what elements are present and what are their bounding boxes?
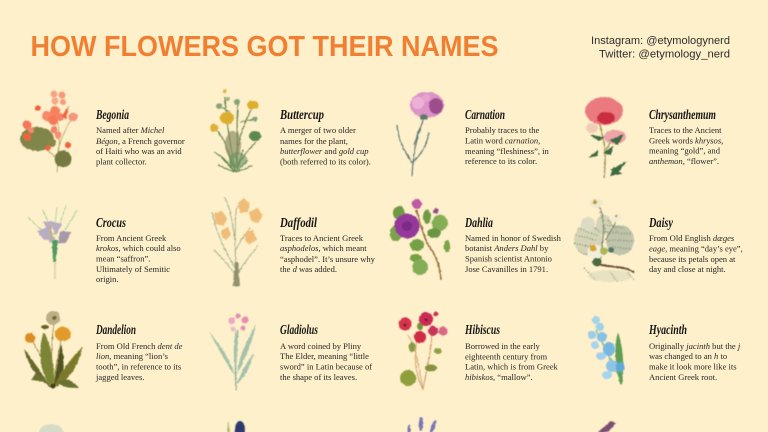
card: Dandelion: [24, 311, 183, 388]
heading: Crocus: [96, 216, 126, 231]
icon: daffodil flower: [212, 197, 263, 286]
text block: A merger of two older: [280, 125, 356, 135]
heading: Hyacinth: [648, 323, 687, 338]
heading: Dahlia: [464, 216, 493, 231]
text block: asphodelos, which meant: [280, 243, 367, 253]
card: Gladiolus: [209, 314, 372, 390]
icon: dandelion flower: [24, 311, 83, 388]
card: Begonia: [20, 90, 185, 173]
text block: hibiskos, “mallow”.: [465, 372, 533, 382]
text block: Bégon, a French governor: [96, 136, 185, 146]
text block: From Ancient Greek: [96, 233, 167, 243]
text block: “asphodel”. It’s unsure why: [280, 254, 376, 264]
text block: names for the plant,: [280, 136, 348, 146]
text block: origin.: [96, 274, 119, 284]
heading: Hibiscus: [464, 323, 500, 338]
social handles: Instagram: @etymologynerd: [591, 35, 730, 47]
text block: Borrowed in the early: [465, 341, 540, 351]
card: Hibiscus: [398, 312, 559, 390]
text block: anthemon, “flower”.: [649, 156, 719, 166]
icon: hyacinth flower: [588, 316, 624, 385]
text block: Probably traces to the: [465, 125, 539, 135]
icon: begonia flower: [20, 90, 78, 173]
icon: lavender: [408, 417, 437, 432]
icon: dahlia flower: [390, 199, 450, 280]
text block: Ultimately of Semitic: [96, 264, 170, 274]
text block: Latin word carnation,: [465, 136, 540, 146]
text block: Spanish scientist Antonio: [465, 254, 552, 264]
text block: eage, meaning “day’s eye”,: [649, 244, 743, 254]
icon: purple spike: [598, 421, 616, 432]
text block: Traces to Ancient Greek: [280, 233, 364, 243]
text block: lion, meaning “lion’s: [96, 351, 168, 361]
text block: make it look more like its: [649, 362, 737, 372]
text block: botanist Anders Dahl by: [465, 243, 548, 253]
card: Buttercup: [210, 89, 371, 172]
text block: reference to its color.: [465, 156, 537, 166]
text block: Named after Michel: [96, 125, 164, 135]
text block: krokos, which could also: [96, 243, 181, 253]
text block: Originally jacinth but the j: [649, 341, 740, 351]
card: Chrysanthemum: [585, 97, 723, 178]
icon: daisy flower: [574, 198, 634, 282]
icon: iris: [227, 420, 245, 432]
heading: Daisy: [648, 216, 674, 231]
icon: crocus flower: [28, 205, 77, 279]
heading: Gladiolus: [280, 323, 318, 338]
heading: Carnation: [465, 108, 505, 123]
text block: The Elder, meaning “little: [280, 351, 369, 361]
text block: the d was added.: [280, 264, 337, 274]
icon: hibiscus flower: [398, 312, 448, 390]
text block: From Old English dæges: [649, 233, 734, 243]
icon: chrysanthemum flower: [585, 97, 627, 178]
text block: day and close at night.: [649, 264, 726, 274]
icon: buttercup flower: [210, 89, 261, 172]
text block: jagged leaves.: [95, 372, 144, 382]
icon: carnation flower: [397, 92, 444, 176]
text block: (both referred to its color).: [280, 156, 371, 166]
heading: Buttercup: [279, 108, 324, 123]
heading: Dandelion: [95, 323, 136, 338]
icon: white flower: [39, 424, 63, 432]
text block: Greek words khrysos,: [649, 136, 723, 146]
text block: sword” in Latin because of: [280, 362, 372, 372]
card: Carnation: [397, 92, 550, 176]
text block: was changed to an h to: [649, 351, 727, 361]
row 4 flower tops: [39, 417, 616, 432]
heading: Chrysanthemum: [649, 108, 716, 123]
text block: Named in honor of Swedish: [465, 233, 562, 243]
text block: butterflower and gold cup: [280, 146, 369, 156]
text block: Jose Cavanilles in 1791.: [465, 264, 548, 274]
text block: Traces to the Ancient: [649, 125, 722, 135]
text block: plant collector.: [96, 156, 147, 166]
text block: because its petals open at: [649, 254, 736, 264]
card: Daffodil: [212, 197, 376, 286]
text block: Latin, which is from Greek: [465, 362, 559, 372]
text block: tooth”, in reference to its: [96, 362, 182, 372]
text block: meaning “fleshiness”, in: [465, 146, 550, 156]
card: Hyacinth: [588, 316, 741, 385]
text block: Ancient Greek root.: [649, 372, 717, 382]
text block: the shape of its leaves.: [280, 372, 357, 382]
heading: Begonia: [95, 108, 129, 123]
social handles: [591, 35, 730, 60]
card: Crocus: [28, 205, 181, 284]
text block: meaning “gold”, and: [649, 146, 721, 156]
card: Daisy: [574, 198, 743, 282]
text block: eighteenth century from: [465, 352, 547, 362]
icon: gladiolus flower: [209, 314, 256, 390]
text block: A word coined by Pliny: [280, 341, 362, 351]
social handles: Twitter: @etymology_nerd: [599, 48, 730, 60]
heading: Daffodil: [279, 216, 317, 231]
text block: of Haiti who was an avid: [96, 146, 182, 156]
text block: From Old French dent de: [96, 341, 182, 351]
text block: mean “saffron”.: [96, 254, 150, 264]
card: Dahlia: [390, 199, 562, 280]
title: HOW FLOWERS GOT THEIR NAMES: [30, 30, 498, 62]
